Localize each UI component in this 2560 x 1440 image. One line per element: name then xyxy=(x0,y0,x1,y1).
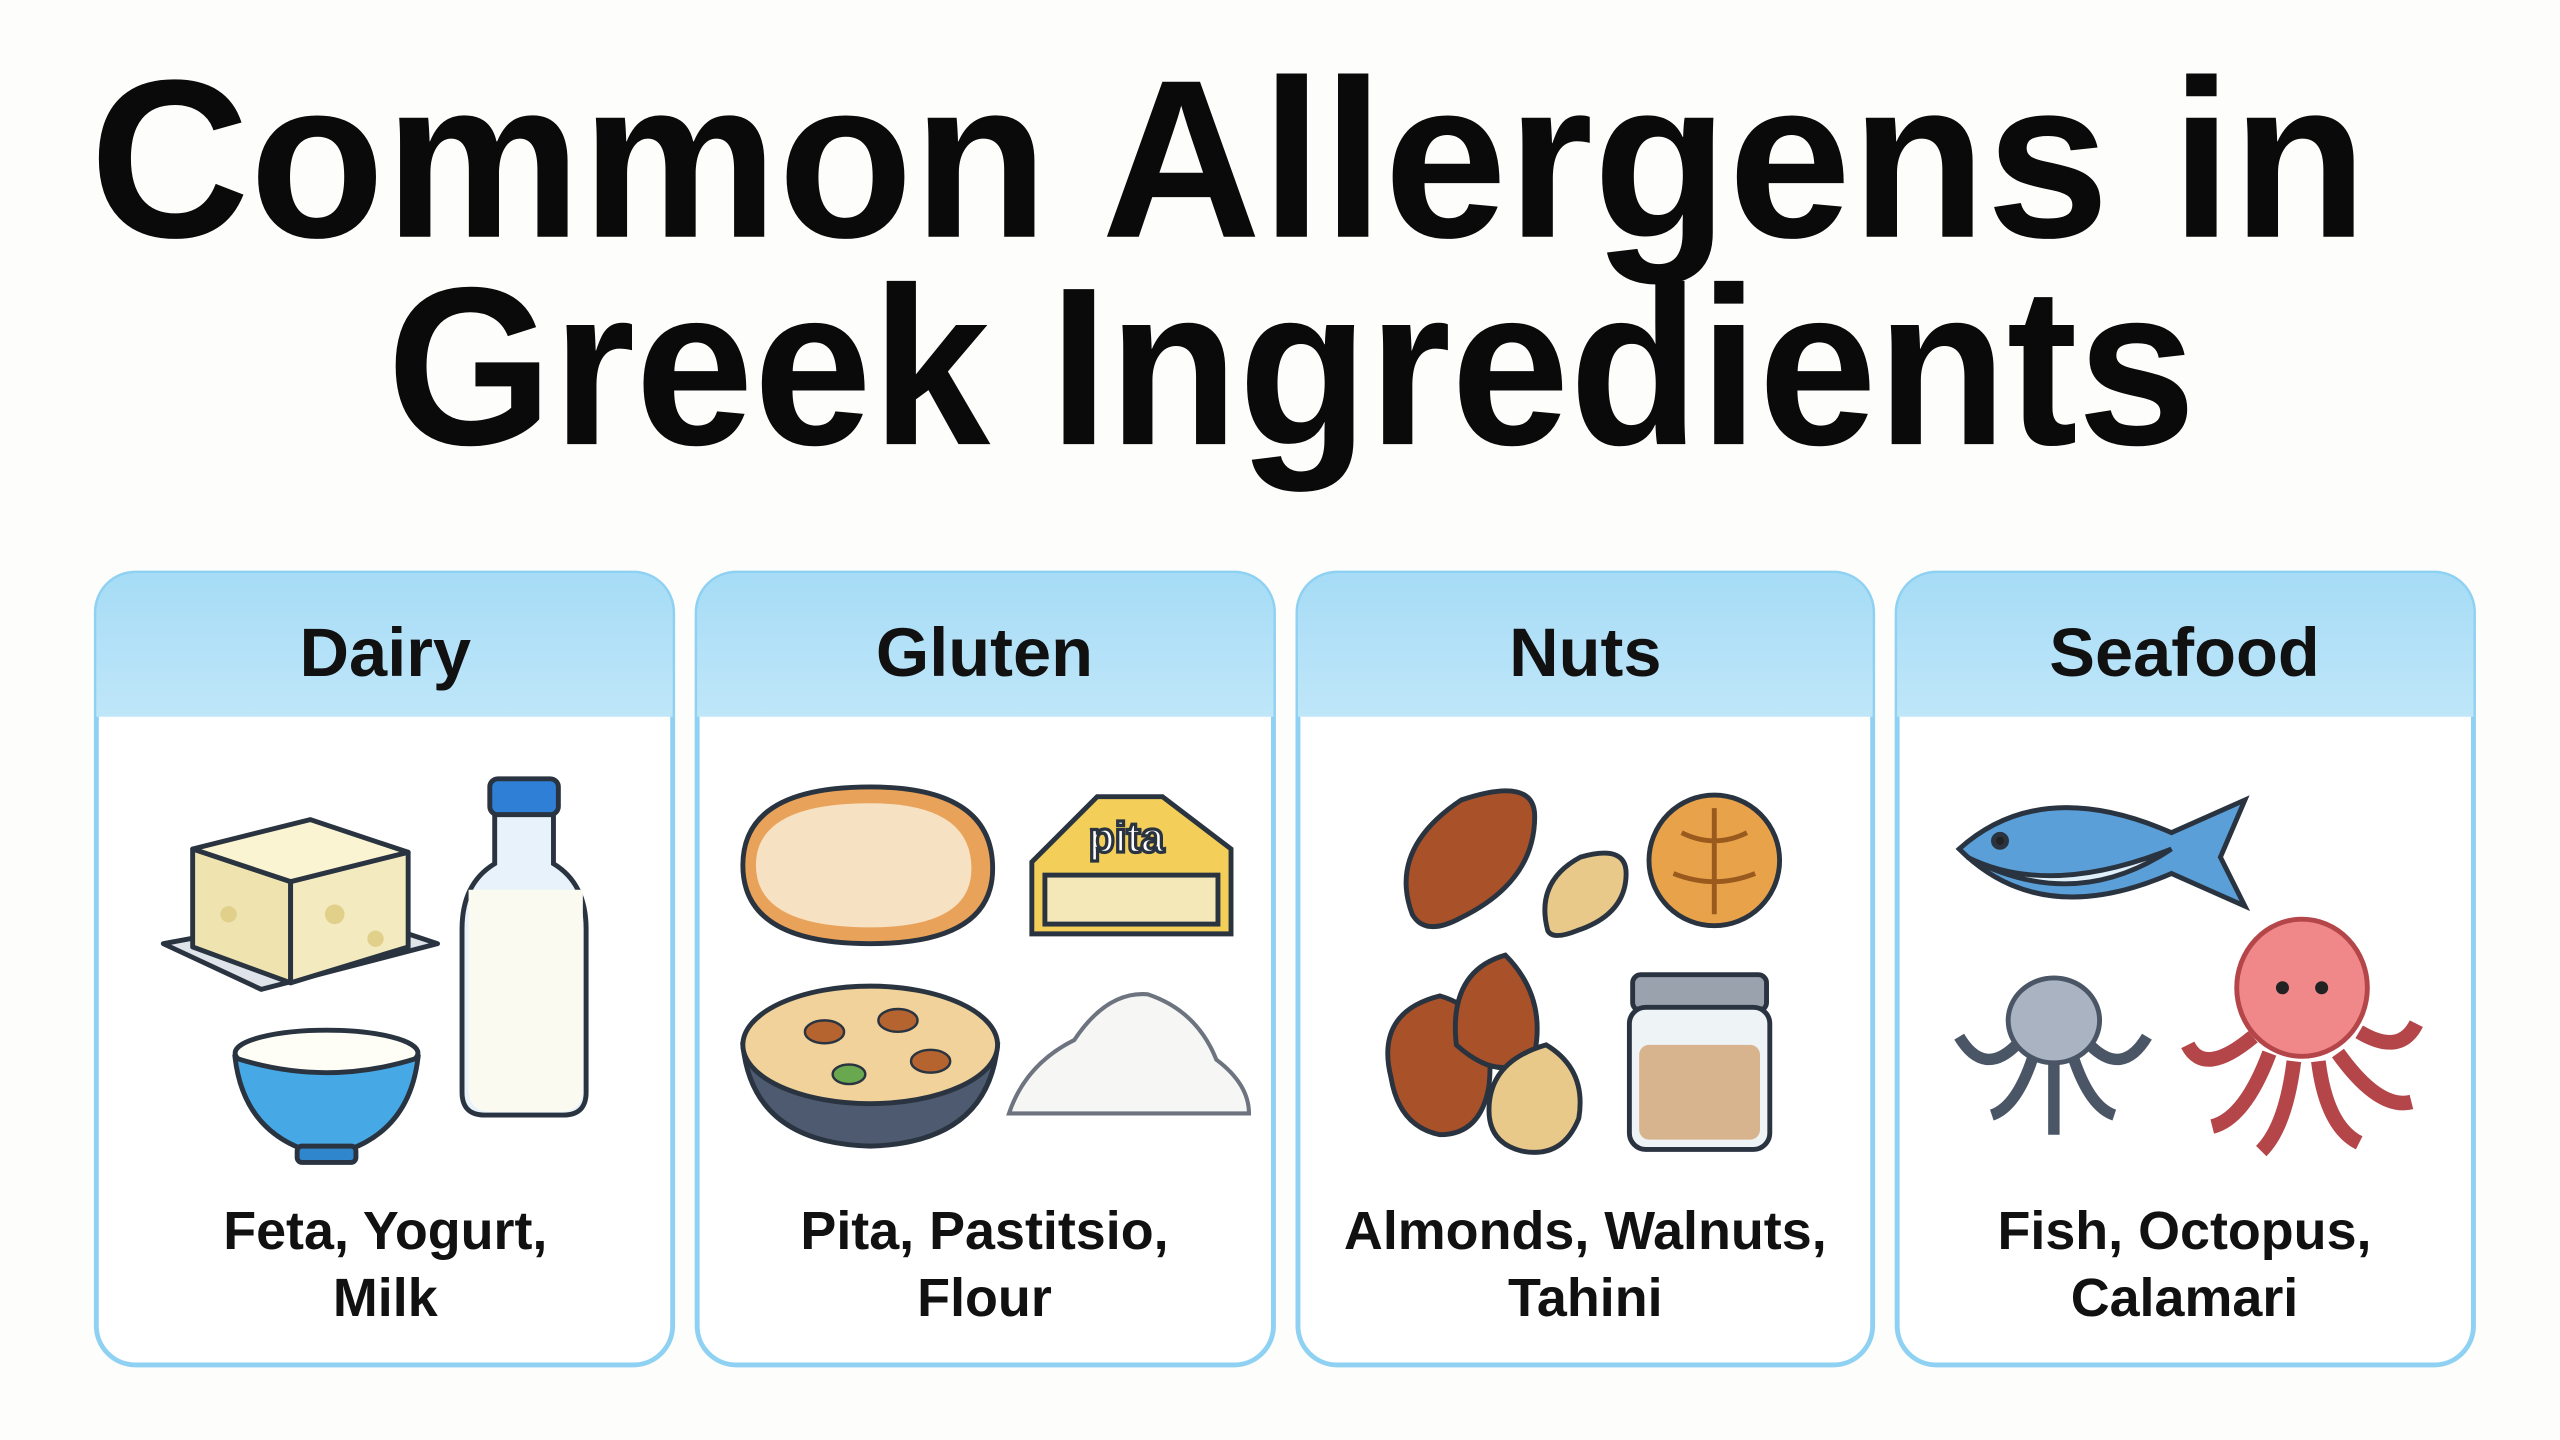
heading: Seafood: Seafood xyxy=(2049,614,2320,691)
icon: pastitsio xyxy=(743,986,998,1146)
title: Greek Ingredients xyxy=(387,240,2196,492)
icon: feta cheese xyxy=(163,820,438,989)
panel: dairy: Milk xyxy=(333,1268,438,1328)
icon: bread xyxy=(743,787,993,944)
icon: fish xyxy=(1959,800,2245,906)
label: gluten items: Pita, Pastitsio, xyxy=(800,1201,1169,1261)
icon: yogurt bowl xyxy=(235,1030,418,1162)
label: nuts items: Almonds, Walnuts, xyxy=(1344,1201,1827,1261)
icon: walnut xyxy=(1649,795,1780,926)
icon: octopus xyxy=(2188,919,2416,1151)
panel: gluten xyxy=(697,573,1273,1365)
panel: nuts: Tahini xyxy=(1508,1268,1663,1328)
heading: Nuts: Nuts xyxy=(1509,614,1661,691)
icon: squid xyxy=(1959,978,2147,1135)
heading: Gluten: Gluten xyxy=(876,614,1093,691)
icon: tahini jar xyxy=(1629,975,1770,1149)
label: dairy items: Feta, Yogurt, xyxy=(223,1201,547,1261)
panel: nuts xyxy=(1298,573,1873,1365)
title: Common Allergens in xyxy=(90,33,2367,285)
panel: seafood: Calamari xyxy=(2071,1268,2298,1328)
label: seafood items: Fish, Octopus, xyxy=(1997,1201,2372,1261)
title xyxy=(90,33,2367,492)
heading: Dairy: Dairy xyxy=(300,614,471,691)
panel: dairy xyxy=(96,573,673,1365)
icon: milk bottle xyxy=(462,779,586,1115)
icon: flour pile xyxy=(1009,994,1249,1113)
panel: seafood xyxy=(1897,573,2473,1365)
icon: pita box xyxy=(1032,797,1231,934)
panel: gluten: Flour xyxy=(917,1268,1052,1328)
icon: pita box: pita xyxy=(1089,814,1165,861)
icon: almonds xyxy=(1388,791,1626,1152)
